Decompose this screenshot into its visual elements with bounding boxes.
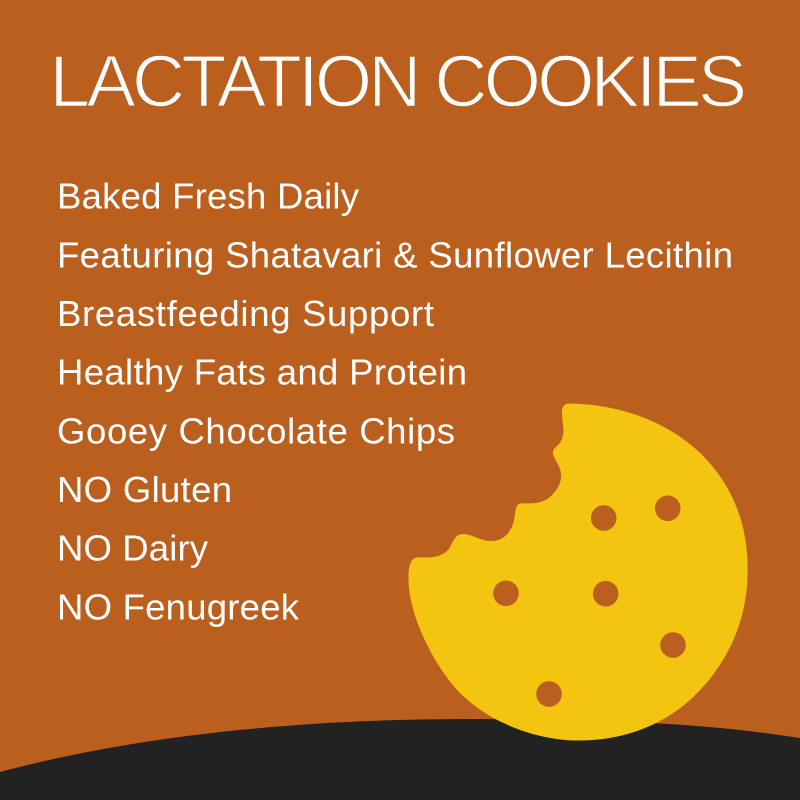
- list item: no gluten: NO Gluten: [57, 469, 232, 510]
- feature list: [57, 176, 733, 628]
- icon: bitten cookie: [408, 404, 748, 741]
- title: LACTATION COOKIES: [50, 40, 747, 122]
- chocolate chips: [493, 496, 686, 707]
- list item: breastfeeding support: Breastfeeding Support: [57, 293, 434, 334]
- list item: chocolate chips: Gooey Chocolate Chips: [57, 410, 455, 452]
- list item: no fenugreek: NO Fenugreek: [57, 586, 300, 628]
- list item: healthy fats: Healthy Fats and Protein: [57, 352, 467, 392]
- list item: baked fresh: Baked Fresh Daily: [57, 176, 360, 216]
- list item: no dairy: NO Dairy: [57, 528, 209, 568]
- list item: ingredients: Featuring Shatavari & Sunflower Lecithin: [57, 234, 733, 276]
- cookie body: [408, 404, 748, 741]
- dark ground curve: [0, 719, 800, 800]
